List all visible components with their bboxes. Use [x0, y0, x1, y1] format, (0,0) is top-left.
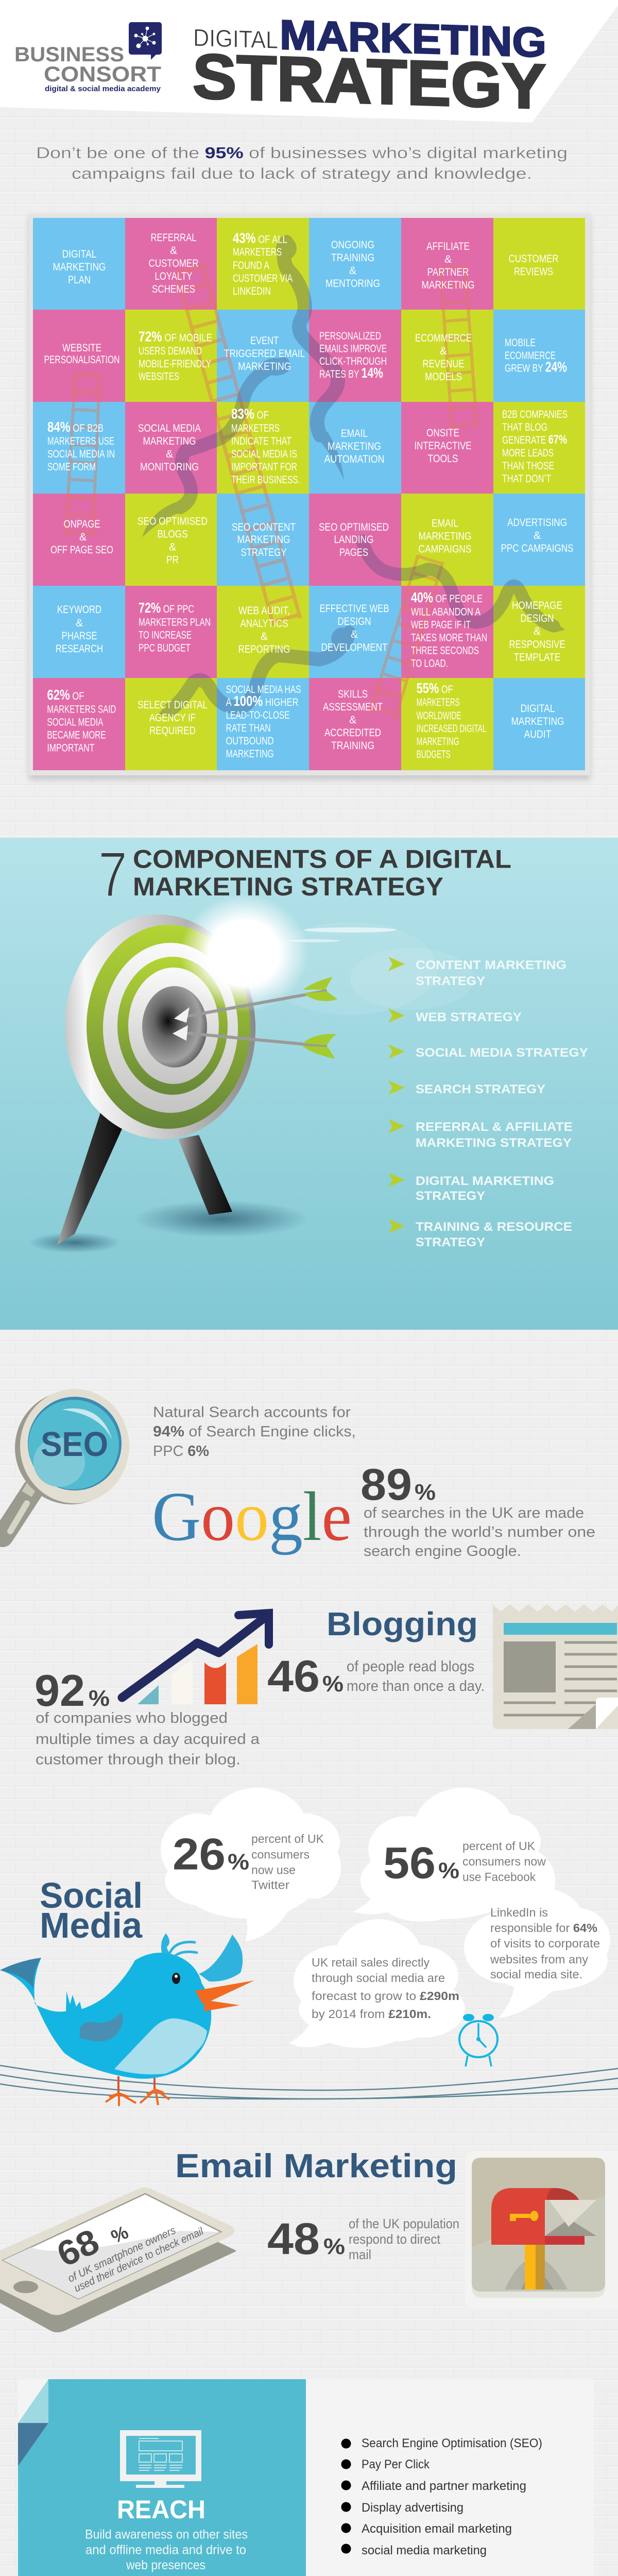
title: Digital Marketing Strategy: STRATEGY	[193, 41, 546, 123]
row 1 labels: SCHEMES	[152, 283, 195, 295]
row 6 labels: ASSESSMENT	[323, 701, 383, 713]
stat: 92 percent: of companies who blogged	[36, 1710, 228, 1726]
row 6 labels: RATE THAN	[226, 722, 271, 734]
heading	[98, 840, 511, 910]
row 2 labels: MOBILE	[505, 337, 536, 349]
row 5 labels: DESIGN	[520, 613, 554, 624]
icon: blue bird	[0, 1935, 254, 2106]
row 3 labels: MARKETING	[143, 435, 196, 447]
row 2 labels: &	[440, 345, 447, 357]
heading: Social Media	[40, 1875, 143, 1945]
item: training and resource	[388, 1219, 572, 1249]
stat: 48 percent	[267, 2214, 459, 2264]
row 1 labels: AFFILIATE	[426, 241, 470, 252]
callout: 26 percent Twitter: consumers	[251, 1848, 310, 1861]
row 5 labels: &	[534, 625, 541, 637]
item: content marketing strategy: CONTENT MARKETING	[416, 958, 566, 972]
row 2 labels: ECOMMERCE	[505, 350, 556, 362]
heading: COMPONENTS OF A DIGITAL	[133, 845, 511, 874]
callout: LinkedIn: responsible for 64%	[490, 1921, 597, 1935]
logo: Business Consort: BUSINESS	[14, 43, 124, 66]
row 3 labels: INTERACTIVE	[414, 440, 472, 452]
list: reach tactics: Pay Per Click	[362, 2458, 430, 2471]
row 1 labels: MENTORING	[325, 278, 380, 290]
heading: Social Media: Social	[40, 1875, 143, 1916]
stat: 92 percent: customer through their blog.	[36, 1752, 241, 1768]
row 1 labels	[53, 230, 558, 297]
item: referral and affiliate: REFERRAL & AFFILIATE	[416, 1120, 573, 1134]
callout: LinkedIn: of visits to corporate	[490, 1937, 600, 1950]
item: search strategy	[388, 1080, 545, 1096]
callout: 56 percent Facebook: %	[438, 1858, 459, 1884]
row 6 labels: SOCIAL MEDIA	[47, 717, 103, 728]
row 4 labels	[50, 516, 574, 566]
text: natural search: 94% of Search Engine clicks,	[153, 1423, 356, 1440]
row 2 labels	[44, 329, 567, 383]
row 5 labels: EFFECTIVE WEB	[319, 603, 389, 615]
section: reach, act and convert, engage	[18, 2379, 594, 2576]
icon: SEO magnifier	[3, 1389, 129, 1536]
stat: 46 percent: %	[322, 1671, 344, 1697]
row 3 labels: SOCIAL MEDIA	[138, 422, 201, 434]
row 3 labels: MARKETERS	[231, 422, 280, 434]
row 1 labels: LOYALTY	[154, 270, 193, 282]
row 4 labels: EMAIL	[432, 517, 458, 530]
row 4 labels: PPC CAMPAIGNS	[501, 543, 574, 554]
row 3 labels: MARKETING	[328, 440, 381, 452]
row 6 labels	[47, 680, 564, 760]
row 3 labels: AUTOMATION	[324, 453, 384, 465]
item: search strategy: SEARCH STRATEGY	[416, 1082, 545, 1096]
row 4 labels: ADVERTISING	[507, 517, 567, 529]
icon: mailbox	[465, 2151, 618, 2310]
row 4 labels: OFF PAGE SEO	[50, 544, 113, 556]
stat: 68 percent: used their device to check email	[73, 2225, 206, 2295]
section: blogging	[35, 1604, 618, 1768]
row 1 labels: &	[444, 253, 452, 265]
row 4 labels: STRATEGY	[241, 547, 286, 558]
row 2 labels: PERSONALISATION	[44, 354, 119, 366]
row 6 labels: IMPORTANT	[47, 742, 95, 754]
snakes	[142, 237, 565, 716]
row 6 labels: MARKETING	[511, 716, 564, 727]
row 2 labels: 72% OF MOBILE	[139, 329, 212, 344]
row 2 labels: PERSONALIZED	[319, 330, 381, 342]
row 5 labels: TO INCREASE	[139, 630, 192, 641]
row 6 labels: 62% OF	[47, 687, 84, 703]
stat: 89 percent: 89	[360, 1460, 412, 1510]
row 2 labels: MODELS	[425, 371, 462, 383]
row 4 labels: SEO OPTIMISED	[138, 516, 208, 528]
row 1 labels: REFERRAL	[150, 232, 197, 244]
row 6 labels: DIGITAL	[520, 703, 555, 715]
text: natural search	[153, 1404, 356, 1460]
row 2 labels: EVENT	[250, 335, 279, 347]
chart: rising bars and arrow	[122, 1613, 269, 1704]
row 6 labels: REQUIRED	[149, 725, 196, 737]
row 5 labels: DEVELOPMENT	[321, 642, 388, 654]
row 6 labels: AUDIT	[524, 728, 552, 740]
row 3 labels: SOME FORM	[47, 461, 96, 473]
row 6 labels: BECAME MORE	[47, 730, 106, 741]
row 3 labels: SOCIAL MEDIA IS	[231, 448, 297, 460]
row 5 labels: PPC BUDGET	[139, 642, 191, 654]
row 5 labels: HOMEPAGE	[512, 600, 562, 612]
row 4 labels: LANDING	[334, 534, 374, 546]
row 2 labels: ECOMMERCE	[415, 332, 472, 344]
row 1 labels: MARKETING	[421, 279, 475, 291]
row 3 labels: &	[166, 448, 173, 460]
stat: 89 percent: search engine Google.	[364, 1543, 521, 1560]
heading: 7	[98, 840, 127, 910]
stat: 68 percent: 68	[51, 2222, 105, 2275]
item: web strategy	[388, 1008, 522, 1024]
row 5 labels: WILL ABANDON A	[411, 606, 480, 618]
stat: 89 percent: through the world’s number one	[364, 1524, 595, 1540]
panel: reach: and offline media and drive to	[85, 2543, 246, 2557]
row 5 labels: ANALYTICS	[240, 618, 288, 630]
row 6 labels: WORLDWIDE	[417, 710, 461, 722]
row 3 labels: ONSITE	[426, 427, 459, 439]
icon: speech bubble network	[129, 22, 162, 60]
intro text: Don’t be one of the 95% of businesses who’s digital marketing	[36, 144, 568, 162]
callout: 26 percent Twitter: 26	[173, 1830, 226, 1879]
row 5 labels: &	[351, 629, 358, 640]
row 6 labels: SKILLS	[338, 688, 368, 700]
text: natural search: Natural Search accounts for	[153, 1404, 351, 1421]
row 3 labels: THAN THOSE	[502, 460, 554, 472]
callout: 56 percent Facebook: 56	[383, 1838, 436, 1888]
icon: smartphone	[0, 2188, 236, 2332]
row 4 labels: &	[79, 531, 87, 543]
callout: LinkedIn: social media site.	[490, 1968, 582, 1981]
row 3 labels: 83% OF	[231, 406, 269, 421]
item: web strategy: WEB STRATEGY	[416, 1010, 522, 1024]
panel: 7 components	[0, 838, 618, 1330]
icon: target with arrows	[28, 894, 474, 1253]
stat: 68 percent: %	[108, 2222, 131, 2247]
list: reach tactics: Display advertising	[362, 2501, 464, 2515]
row 6 labels: A 100% HIGHER	[226, 693, 299, 709]
row 3 labels	[47, 406, 568, 486]
panel: reach	[18, 2379, 306, 2576]
stat: 48 percent: 48	[267, 2214, 320, 2264]
row 1 labels: CUSTOMER VIA	[233, 273, 293, 284]
callout: LinkedIn: LinkedIn is	[490, 1906, 548, 1919]
board squares	[33, 218, 585, 770]
row 5 labels: DESIGN	[338, 616, 371, 628]
row 1 labels: 43% OF ALL	[233, 230, 287, 246]
row 2 labels: WEBSITES	[139, 371, 179, 382]
row 4 labels: CAMPAIGNS	[418, 543, 472, 555]
row 3 labels: IMPORTANT FOR	[231, 461, 297, 473]
row 6 labels: MARKETERS SAID	[47, 704, 116, 716]
item: digital marketing strategy	[388, 1173, 554, 1203]
row 4 labels: MARKETING	[418, 531, 472, 542]
logo: Business Consort: digital & social media academy	[45, 84, 161, 93]
row 1 labels: MARKETERS	[233, 246, 282, 258]
stat: 48 percent: %	[323, 2234, 345, 2259]
callout: UK retail sales	[289, 1919, 465, 2048]
section: email marketing	[0, 2147, 618, 2332]
row 5 labels: TEMPLATE	[514, 651, 560, 664]
row 6 labels: OUTBOUND	[226, 735, 274, 747]
row 5 labels: &	[76, 617, 83, 629]
row 5 labels: 72% OF PPC	[139, 600, 194, 616]
list: reach tactics: Acquisition email marketing	[362, 2522, 512, 2536]
row 2 labels: WEBSITE	[62, 342, 101, 354]
item: referral and affiliate	[388, 1119, 573, 1150]
list: reach tactics: Affiliate and partner marketing	[362, 2479, 526, 2493]
callout: UK retail sales: through social media are	[312, 1971, 445, 1985]
panel: reach: Build awareness on other sites	[85, 2528, 248, 2542]
panel: snakes and ladders board	[29, 214, 590, 780]
row 6 labels: AGENCY IF	[149, 712, 196, 724]
row 5 labels: RESEARCH	[56, 643, 103, 655]
row 3 labels: MONITORING	[140, 461, 199, 473]
row 3 labels: MARKETERS USE	[47, 435, 114, 447]
row 5 labels: KEYWORD	[57, 604, 101, 616]
row 4 labels: SEO CONTENT	[232, 521, 296, 533]
row 1 labels: TRAINING	[331, 252, 374, 264]
row 4 labels: ONPAGE	[64, 518, 100, 530]
row 5 labels: MARKETERS PLAN	[139, 617, 211, 629]
callout: 56 percent Facebook: use Facebook	[462, 1870, 536, 1884]
row 6 labels: 55% OF	[417, 680, 453, 696]
row 4 labels: PAGES	[339, 547, 368, 558]
list: strategy components	[388, 957, 588, 1249]
icon: monitor	[120, 2430, 201, 2488]
list: reach tactics: social media marketing	[362, 2544, 487, 2557]
stat: 68 percent: of UK smartphone owners	[66, 2224, 178, 2285]
row 6 labels: LEAD-TO-CLOSE	[226, 709, 290, 721]
header panel	[0, 0, 618, 123]
row 3 labels: 84% OF B2B	[47, 419, 104, 435]
row 4 labels: SEO OPTIMISED	[319, 521, 389, 533]
row 4 labels: MARKETING	[237, 534, 290, 546]
text: natural search: PPC 6%	[153, 1443, 209, 1460]
callout: 56 percent Facebook: percent of UK	[462, 1839, 536, 1853]
callout: UK retail sales: by 2014 from £210m.	[312, 2007, 431, 2021]
item: digital marketing strategy: STRATEGY	[416, 1189, 485, 1203]
row 4 labels: PR	[166, 554, 179, 566]
row 5 labels	[56, 589, 565, 670]
panel: reach: web presences	[126, 2558, 205, 2572]
stat: 92 percent: 92	[35, 1666, 85, 1716]
row 3 labels: THAT BLOG	[502, 421, 547, 433]
stat: 46 percent: more than once a day.	[347, 1678, 485, 1694]
row 3 labels: GENERATE 67%	[502, 433, 567, 447]
row 4 labels: &	[534, 530, 541, 541]
row 1 labels: ONGOING	[331, 239, 374, 251]
row 5 labels: WEB PAGE IF IT	[411, 619, 471, 631]
row 6 labels: BUDGETS	[417, 749, 451, 760]
heading: MARKETING STRATEGY	[133, 872, 443, 901]
callout: 26 percent Twitter: now use	[251, 1863, 296, 1876]
row 2 labels: CLICK-THROUGH	[319, 355, 387, 367]
icon: SEO magnifier: SEO	[41, 1425, 108, 1464]
callout: 26 percent Twitter: Twitter	[251, 1878, 289, 1892]
stat: 46 percent: 46	[267, 1652, 320, 1701]
list: reach tactics: Search Engine Optimisation (SEO)	[362, 2436, 542, 2450]
intro text: campaigns fail due to lack of strategy and knowledge.	[72, 164, 532, 182]
row 4 labels: BLOGS	[158, 529, 187, 540]
logo: Business Consort	[14, 22, 162, 93]
item: training and resource: STRATEGY	[416, 1235, 485, 1249]
section: SEO	[3, 1389, 595, 1560]
row 2 labels: MOBILE-FRIENDLY	[139, 358, 211, 370]
item: social media strategy: SOCIAL MEDIA STRATEGY	[416, 1046, 588, 1060]
row 6 labels: &	[349, 714, 356, 726]
row 3 labels: SOCIAL MEDIA IN	[47, 448, 115, 460]
item: content marketing strategy	[388, 957, 566, 988]
callout: 26 percent Twitter: percent of UK	[251, 1832, 324, 1845]
row 2 labels: GREW BY 24%	[505, 359, 567, 375]
heading: Social Media: Media	[40, 1905, 143, 1945]
row 3 labels: THAT DON’T	[502, 473, 551, 485]
row 6 labels: ACCREDITED	[324, 727, 381, 739]
ladders	[66, 264, 477, 721]
stat: 46 percent: of people read blogs	[347, 1658, 474, 1675]
intro text	[36, 144, 568, 182]
row 5 labels: WEB AUDIT,	[238, 605, 290, 617]
row 1 labels: REVIEWS	[514, 266, 553, 278]
stat: 92 percent: multiple times a day acquired a	[36, 1731, 260, 1748]
row 4 labels: &	[169, 541, 176, 553]
panel: reach: REACH	[117, 2495, 205, 2524]
callout: 26 percent Twitter: %	[228, 1850, 249, 1875]
callout: 56 percent Facebook: consumers now	[462, 1855, 546, 1868]
row 1 labels: PARTNER	[427, 266, 469, 278]
row 1 labels: &	[349, 265, 356, 277]
icon: newspaper	[493, 1604, 618, 1729]
row 2 labels: USERS DEMAND	[139, 345, 202, 357]
row 6 labels: SELECT DIGITAL	[138, 699, 208, 711]
stat: 92 percent	[35, 1666, 260, 1768]
item: referral and affiliate: MARKETING STRATEGY	[416, 1136, 572, 1150]
row 6 labels: TRAINING	[331, 740, 374, 752]
row 1 labels: LINKEDIN	[233, 285, 271, 297]
row 5 labels: TAKES MORE THAN	[411, 632, 487, 644]
stat: 46 percent	[267, 1652, 485, 1701]
callout: 26 percent Twitter	[161, 1788, 341, 1941]
icon: telephone wires	[0, 2065, 618, 2099]
item: digital marketing strategy: DIGITAL MARKETING	[416, 1174, 554, 1188]
title: Digital Marketing Strategy: DIGITAL	[193, 24, 278, 54]
icon: alarm clock	[459, 2014, 497, 2066]
row 3 labels: EMAIL	[341, 428, 368, 439]
stat: 92 percent: %	[89, 1686, 110, 1711]
row 1 labels: &	[170, 245, 177, 257]
row 1 labels: DIGITAL	[62, 248, 97, 260]
row 2 labels: REVENUE	[422, 358, 465, 370]
row 5 labels: TO LOAD.	[411, 658, 448, 670]
logo: Google: Google	[152, 1478, 352, 1555]
row 1 labels: PLAN	[68, 274, 91, 286]
row 1 labels: MARKETING	[53, 261, 106, 273]
stat: 48 percent: mail	[349, 2247, 371, 2262]
stat: 48 percent: of the UK population	[349, 2216, 459, 2231]
row 3 labels: MORE LEADS	[502, 447, 554, 459]
row 5 labels: &	[261, 631, 268, 642]
row 1 labels: CUSTOMER	[509, 253, 558, 265]
stat: 89 percent: %	[415, 1480, 436, 1505]
heading: Email Marketing: Email Marketing	[175, 2147, 457, 2184]
callout: UK retail sales: UK retail sales directly	[312, 1956, 430, 1969]
callout: LinkedIn: websites from any	[490, 1953, 589, 1966]
row 6 labels: INCREASED DIGITAL	[417, 723, 487, 735]
row 6 labels: SOCIAL MEDIA HAS	[226, 684, 301, 696]
row 5 labels: RESPONSIVE	[509, 639, 565, 650]
row 1 labels: FOUND A	[233, 260, 269, 272]
row 6 labels: MARKETERS	[417, 697, 460, 708]
row 5 labels: REPORTING	[238, 643, 290, 655]
row 3 labels: THEIR BUSINESS.	[231, 474, 300, 486]
row 2 labels: EMAILS IMPROVE	[319, 343, 387, 355]
row 2 labels: RATES BY 14%	[319, 365, 383, 381]
row 6 labels: MARKETING	[417, 736, 459, 748]
logo: Business Consort: CONSORT	[44, 62, 161, 86]
row 2 labels: TRIGGERED EMAIL	[224, 348, 305, 360]
title: Digital Marketing Strategy: MARKETING	[280, 12, 546, 66]
row 5 labels: 40% OF PEOPLE	[411, 589, 483, 605]
row 6 labels: MARKETING	[226, 748, 274, 760]
stat: 48 percent: respond to direct	[349, 2231, 441, 2247]
stat: 89 percent: of searches in the UK are made	[364, 1505, 584, 1521]
callout: UK retail sales: forecast to grow to £290m	[312, 1989, 459, 2003]
row 5 labels: THREE SECONDS	[411, 645, 479, 657]
row 3 labels: TOOLS	[427, 453, 458, 465]
row 3 labels: B2B COMPANIES	[502, 409, 568, 420]
callout: LinkedIn	[464, 1888, 610, 2018]
stat: 89 percent	[360, 1460, 595, 1560]
item: content marketing strategy: STRATEGY	[416, 974, 485, 988]
item: training and resource: TRAINING & RESOURCE	[416, 1220, 572, 1234]
list: reach tactics	[341, 2436, 542, 2557]
section: social media	[0, 1788, 618, 2106]
row 1 labels: CUSTOMER	[148, 258, 199, 269]
row 5 labels: PHARSE	[62, 630, 97, 642]
row 2 labels: MARKETING	[238, 361, 291, 372]
callout: 56 percent Facebook	[353, 1788, 555, 1922]
heading: Blogging: Blogging	[327, 1605, 478, 1642]
row 3 labels: INDICATE THAT	[231, 435, 291, 447]
